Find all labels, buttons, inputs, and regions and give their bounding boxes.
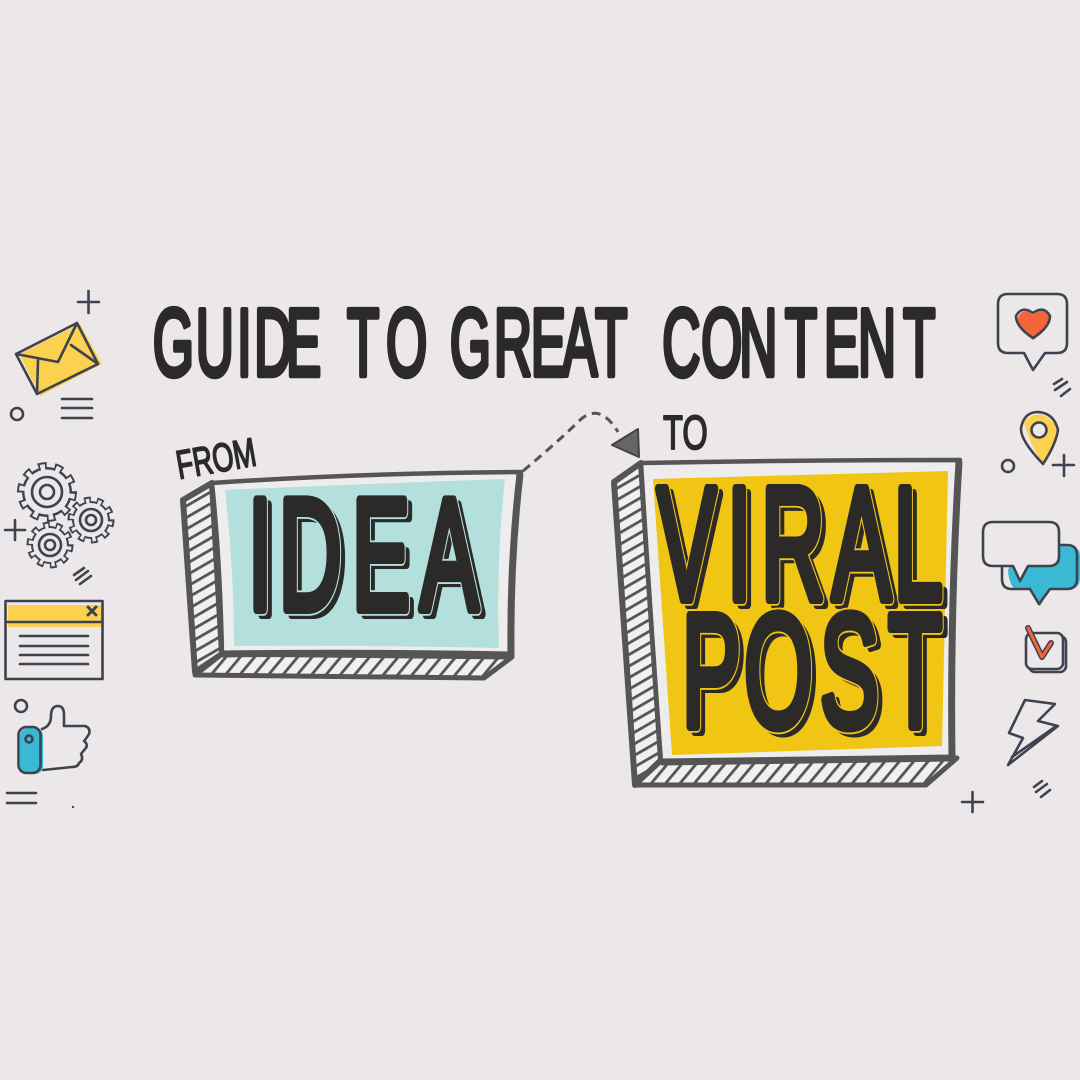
words: viral post: [657, 455, 948, 766]
icon: gears: [21, 466, 111, 565]
icon: hatch left: [74, 568, 91, 584]
idea box front frame: [212, 472, 521, 655]
panel: idea box: [183, 468, 521, 678]
viral box yellow panel: [653, 471, 948, 755]
label: to: TO: [663, 406, 708, 460]
words: viral post: POST: [682, 582, 942, 761]
words: viral post: VIRAL: [657, 455, 943, 634]
icon: plus bottom: [962, 792, 983, 812]
small mark: [72, 806, 74, 808]
icon: circle right: [1002, 460, 1014, 472]
idea box left side hatching: [183, 483, 222, 672]
panel: viral post box: [614, 455, 960, 785]
icon: hatch top right: [1054, 379, 1070, 396]
icon: checkbox: [1026, 628, 1066, 672]
icon: small circle: [15, 700, 27, 712]
icon: circle and lines: [11, 399, 92, 420]
viral box heavy right and bottom edge: [661, 462, 959, 762]
words: viral post: VIRAL: [657, 455, 943, 634]
icon: heart speech bubble: [998, 294, 1067, 370]
icon: chat bubbles: [983, 522, 1080, 606]
word: idea: IDEA: [248, 468, 478, 644]
viral box front frame: [641, 460, 960, 762]
viral box bottom hatching: [635, 758, 957, 785]
title: GUIDE TO GREAT CONTENT: [153, 290, 935, 397]
icon: lightning bolt: [1008, 700, 1058, 765]
idea box teal panel: [225, 479, 505, 648]
idea box heavy right and bottom edge: [222, 474, 520, 655]
icon: plus right: [1053, 455, 1074, 476]
icon: plus top left: [78, 291, 99, 313]
label: from: FROM: [173, 431, 259, 488]
icon: browser window: [6, 601, 104, 679]
icon: location pin: [1021, 412, 1058, 466]
icon: envelope: [16, 323, 102, 396]
idea box bottom hatching: [195, 654, 512, 678]
words: viral post: POST: [682, 582, 942, 761]
words: viral post: VIRAL: [662, 460, 948, 639]
viral box left side hatching: [614, 463, 661, 785]
icon: lines bottom left: [7, 793, 36, 803]
word: idea: IDEA: [248, 468, 478, 644]
arrow: dashed connector: [523, 413, 639, 471]
icon: hatch bottom right: [1034, 781, 1050, 797]
icon: plus left: [5, 520, 25, 540]
word: idea: IDEA: [253, 473, 483, 649]
words: viral post: POST: [687, 587, 947, 766]
icon: thumbs up: [18, 706, 90, 774]
